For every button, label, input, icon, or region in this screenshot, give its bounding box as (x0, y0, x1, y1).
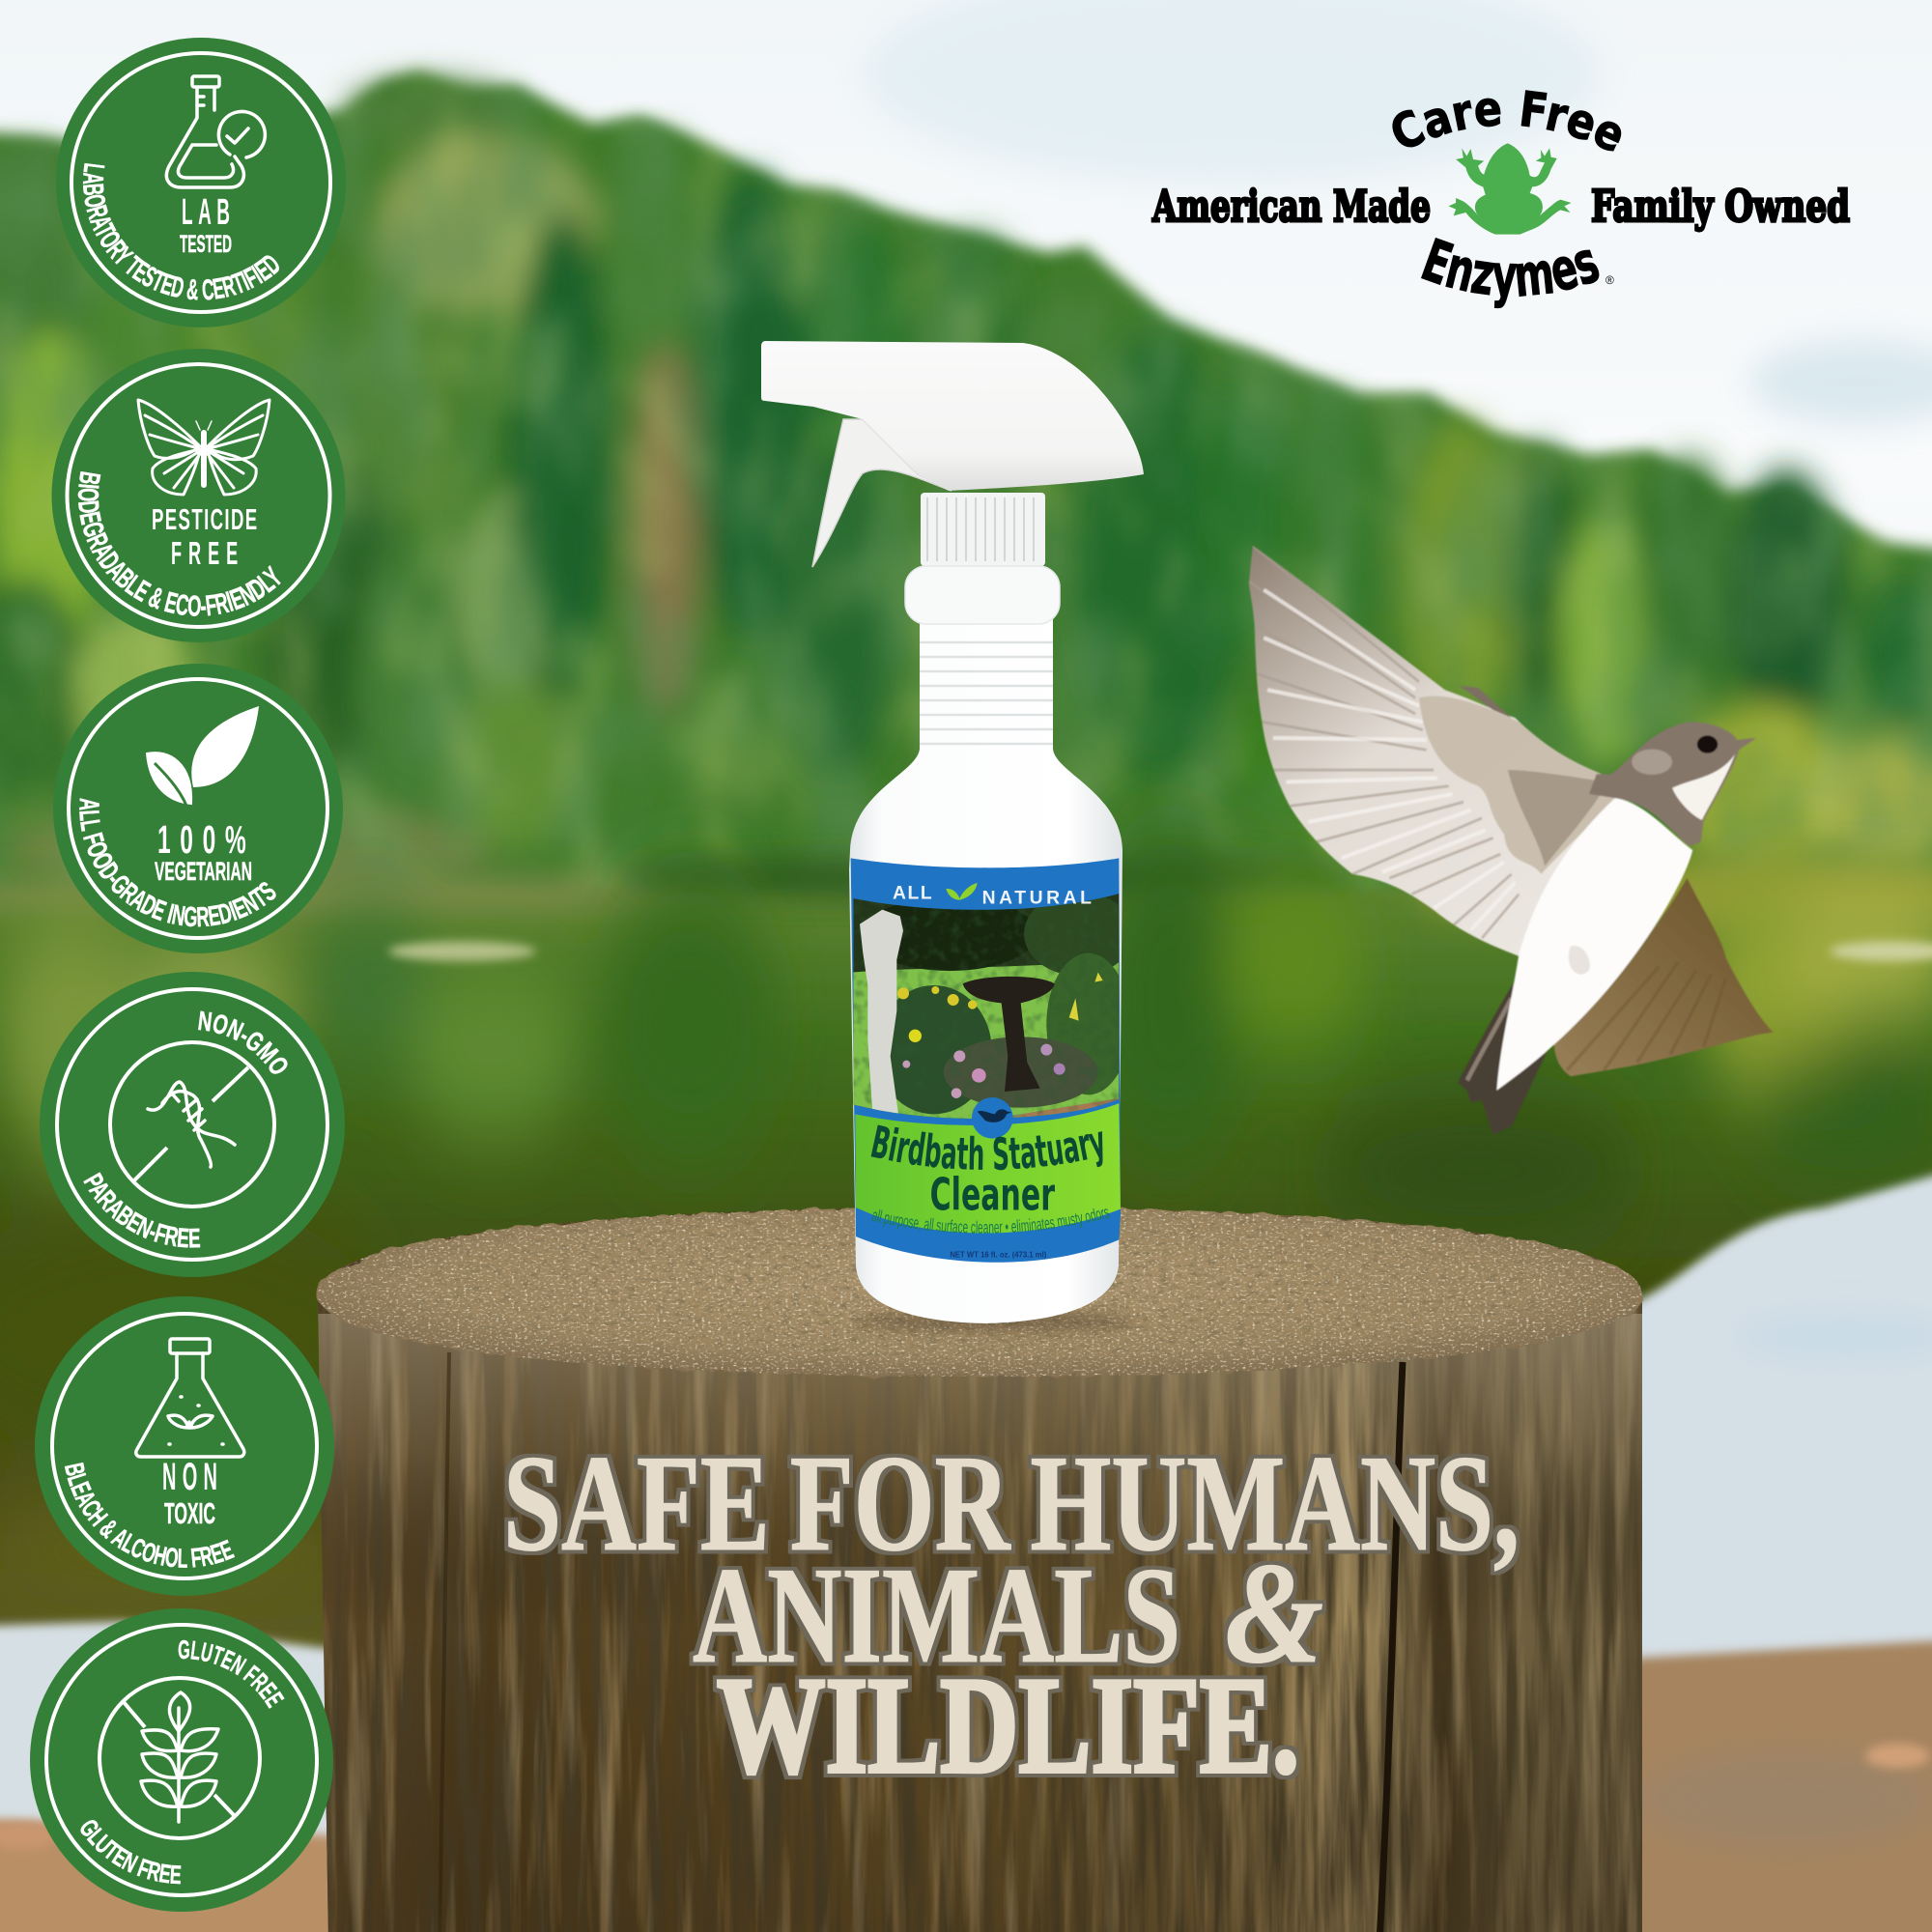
headline: ANIMALS (693, 1539, 1180, 1691)
logo: Enzymes: Enzymes (1421, 238, 1600, 309)
badge text: NON (162, 1454, 217, 1498)
body (1496, 798, 1692, 1091)
badge: pesticide free: FREE (171, 535, 238, 571)
headline: & (1225, 1533, 1323, 1693)
icon: DNA helix (148, 1082, 235, 1167)
near wing (1249, 546, 1619, 956)
birdbath (963, 977, 1055, 1092)
badge: lab tested (56, 38, 346, 327)
badge text: 100% (157, 818, 246, 863)
product bottle (761, 341, 1144, 1337)
badge: gluten free: GLUTEN FREE (73, 1814, 183, 1889)
logo: Care Free: Care Free (1392, 90, 1621, 151)
shoulder ring (905, 566, 1060, 624)
icon: flask with leaves (136, 1339, 244, 1457)
statue (860, 910, 903, 1114)
leaf logo (946, 883, 978, 900)
badge: non toxic: BLEACH & ALCOHOL FREE (59, 1461, 238, 1574)
spray head (761, 341, 1144, 491)
far wing (1554, 878, 1774, 1076)
green band (855, 1103, 1121, 1233)
icon: wheat (141, 1692, 218, 1822)
spray trigger (812, 419, 952, 567)
badge: pesticide free: BIODEGRADABLE & ECO-FRIENDLY (71, 469, 289, 623)
head and collar (1589, 722, 1756, 846)
headline: WILDLIFE. (717, 1649, 1299, 1802)
badge: gluten free (30, 1608, 333, 1912)
badge: non toxic: TOXIC (164, 1496, 215, 1530)
logo: American Made: American Made (1151, 181, 1431, 232)
badge text: GLUTEN FREE (178, 1635, 289, 1712)
badge: non toxic (35, 1296, 334, 1596)
logo: Family Owned: Family Owned (1591, 181, 1850, 232)
brand logo (1151, 80, 1850, 311)
badge: pesticide free (52, 349, 346, 642)
label photo (853, 894, 1119, 1119)
badge text: LAB (182, 192, 230, 233)
icon: green frog (1448, 143, 1572, 235)
product label: Cleaner (930, 1169, 1055, 1221)
icon: flask with check (166, 76, 265, 187)
badge: vegetarian: ALL FOOD-GRADE INGREDIENTS (72, 798, 282, 933)
badge: lab tested: TESTED (180, 231, 232, 258)
icon: leaves (147, 706, 259, 813)
headline: SAFE FOR HUMANS, (503, 1427, 1520, 1579)
logo: Enzymes: ® (1605, 273, 1614, 287)
badge text: PESTICIDE (152, 503, 257, 536)
badge: vegetarian (53, 664, 343, 953)
icon: butterfly (138, 400, 270, 495)
ALL NATURAL: ALL (893, 884, 932, 904)
bottle body (849, 618, 1122, 1323)
badge: non-GMO paraben-free: PARABEN-FREE (78, 1169, 201, 1253)
product label (850, 858, 1121, 1263)
bird seal (972, 1097, 1013, 1139)
badge: lab tested: LABORATORY TESTED & CERTIFIED (83, 162, 279, 300)
tree stump (309, 1198, 1662, 1932)
flying bird (1249, 546, 1774, 1134)
headline (503, 1427, 1520, 1802)
badge text: NON-GMO (196, 1006, 295, 1080)
collar (921, 493, 1045, 566)
tail (1458, 974, 1548, 1134)
product label: NATURAL (982, 888, 1092, 908)
product label: all purpose, all surface cleaner • eliminates musty odors (871, 1208, 1109, 1234)
badge: vegetarian: VEGETARIAN (155, 857, 252, 886)
badge: non-GMO paraben-free (40, 972, 345, 1277)
product label: NET WT 16 fl. oz. (473.1 ml) (950, 1251, 1047, 1260)
product name: Birdbath Statuary (871, 1124, 1103, 1171)
